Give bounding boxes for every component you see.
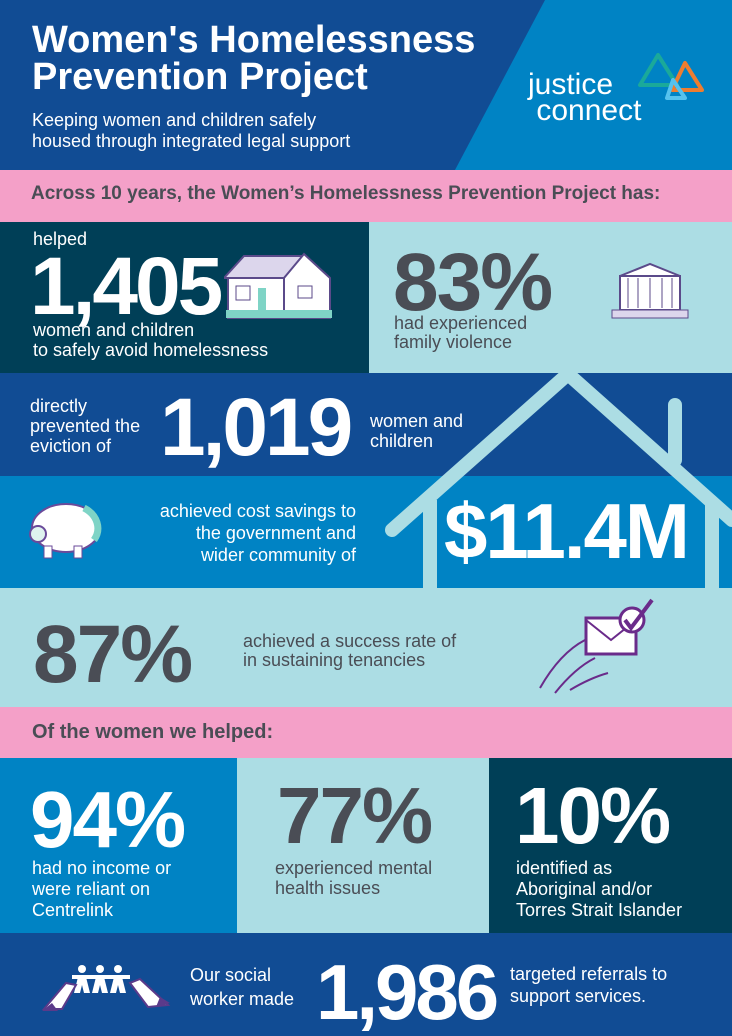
panel: cost savings [0, 476, 732, 588]
panel: 1,019 evictions: directly [30, 396, 87, 416]
icon: envelope with check [539, 598, 654, 694]
panel: 77%: experienced mental [275, 858, 432, 878]
panel: helped 1,405: to safely avoid homelessness [33, 340, 268, 360]
panel: 87% success [0, 588, 732, 707]
subtitle: Keeping women and children safely [32, 110, 316, 130]
panel: helped 1,405: women and children [33, 320, 194, 340]
panel: 1,986 referrals: 1,986 [316, 948, 496, 1036]
logo: justice connect: justice [528, 68, 613, 101]
icon: house [224, 252, 332, 319]
subtitle [32, 110, 350, 151]
panel: 10%: 10% [515, 771, 669, 860]
header panel [0, 0, 732, 170]
panel: 1,019 evictions [0, 373, 732, 476]
panel: 1,019 evictions: prevented the [30, 416, 140, 436]
panel: 94% [0, 758, 237, 933]
panel: 1,986 referrals [0, 933, 732, 1035]
title [32, 19, 475, 98]
logo: justice connect [527, 53, 704, 127]
panel: 1,986 referrals: worker made [190, 989, 294, 1009]
panel: 1,986 referrals: targeted referrals to [510, 964, 667, 984]
panel: 1,019 evictions: eviction of [30, 436, 111, 456]
panel: 87% success: achieved a success rate of [243, 631, 456, 651]
panel: 10%: identified as [516, 858, 612, 878]
panel: cost savings: wider community of [201, 545, 356, 565]
panel: helped 1,405 [0, 222, 369, 373]
logo: justice connect: connect [536, 94, 641, 127]
panel: 83%: 83% [393, 237, 551, 328]
stat: $11.4M: $11.4M [444, 487, 688, 575]
panel: 77% [237, 758, 489, 933]
panel: 83% [369, 222, 732, 373]
panel: 1,019 evictions: women and [370, 411, 463, 431]
icon: courthouse [612, 262, 688, 318]
panel: 94%: had no income or [32, 858, 171, 878]
icon: hands with paper people [42, 965, 170, 1011]
panel: 94%: were reliant on [32, 879, 150, 899]
panel: cost savings: the government and [196, 523, 356, 543]
panel: 94%: Centrelink [32, 900, 113, 920]
panel: 77%: 77% [277, 771, 431, 860]
panel: 1,986 referrals: support services. [510, 986, 646, 1006]
panel: helped 1,405: helped [33, 229, 87, 249]
panel: 83%: had experienced [394, 313, 527, 333]
pink band heading [0, 170, 732, 222]
panel: 1,986 referrals: Our social [190, 965, 271, 985]
panel: 10%: Torres Strait Islander [516, 900, 682, 920]
panel: helped 1,405: 1,405 [30, 241, 220, 332]
panel: 10% [489, 758, 732, 933]
title: Women's Homelessness [32, 19, 475, 61]
panel: cost savings: achieved cost savings to [160, 501, 356, 521]
panel: 10%: Aboriginal and/or [516, 879, 652, 899]
panel: 87% success: in sustaining tenancies [243, 650, 425, 670]
pink band: of the women: Of the women we helped: [32, 721, 273, 743]
pink band heading: Across 10 years, the Women’s Homelessness Prevention Project has: [31, 183, 660, 204]
icon: piggy bank [29, 503, 102, 558]
subtitle: housed through integrated legal support [32, 131, 350, 151]
panel: 87% success: 87% [33, 609, 191, 700]
panel: 94%: 94% [30, 775, 184, 864]
panel: 83%: family violence [394, 332, 512, 352]
panel: 1,019 evictions: children [370, 431, 433, 451]
title: Prevention Project [32, 56, 368, 98]
panel: 1,019 evictions: 1,019 [160, 382, 350, 473]
house outline graphic [385, 373, 732, 588]
pink band: of the women [0, 707, 732, 758]
panel: 77%: health issues [275, 878, 380, 898]
